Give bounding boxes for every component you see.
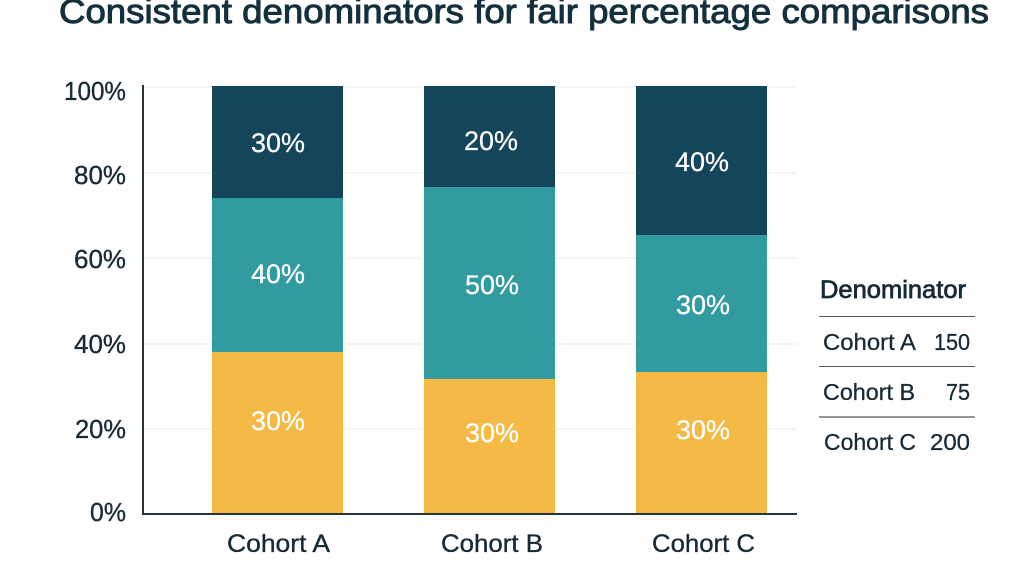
- denominator table: [819, 276, 975, 455]
- bar: Cohort A: 30%: [251, 406, 305, 436]
- y axis labels: 0%: [90, 499, 126, 527]
- bar: Cohort B: 30%: [465, 418, 519, 448]
- bar: Cohort C: 30%: [676, 290, 730, 320]
- x axis labels: Cohort A: [227, 530, 330, 558]
- denominator table: Denominator: [820, 276, 966, 304]
- denominator table: Cohort A: [823, 329, 916, 355]
- denominator table: 150: [934, 329, 970, 355]
- denominator table: 200: [930, 429, 970, 455]
- bar: Cohort B: [424, 86, 555, 514]
- denominator table: Cohort B: [823, 379, 915, 405]
- denominator table: 75: [946, 379, 970, 405]
- y axis labels: 60%: [74, 246, 126, 274]
- y axis labels: 40%: [74, 331, 126, 359]
- bar: Cohort C: 40%: [675, 147, 729, 177]
- y axis labels: 100%: [64, 78, 126, 106]
- bar: Cohort A: 30%: [251, 128, 305, 158]
- denominator table: Cohort C: [824, 429, 916, 455]
- bar: Cohort A: [212, 86, 343, 514]
- x axis labels: Cohort B: [441, 530, 543, 558]
- stacked bar chart: [64, 78, 797, 558]
- bar: Cohort B: 20%: [464, 126, 518, 156]
- bar: Cohort C: [636, 86, 767, 514]
- y axis labels: 80%: [74, 162, 126, 190]
- y axis labels: [64, 78, 126, 527]
- bar: Cohort C: 30%: [676, 415, 730, 445]
- x axis labels: [227, 530, 755, 558]
- bar: Cohort B: 50%: [465, 270, 519, 300]
- x axis labels: Cohort C: [652, 530, 755, 558]
- bar: Cohort A: 40%: [251, 259, 305, 289]
- y axis labels: 20%: [75, 416, 126, 444]
